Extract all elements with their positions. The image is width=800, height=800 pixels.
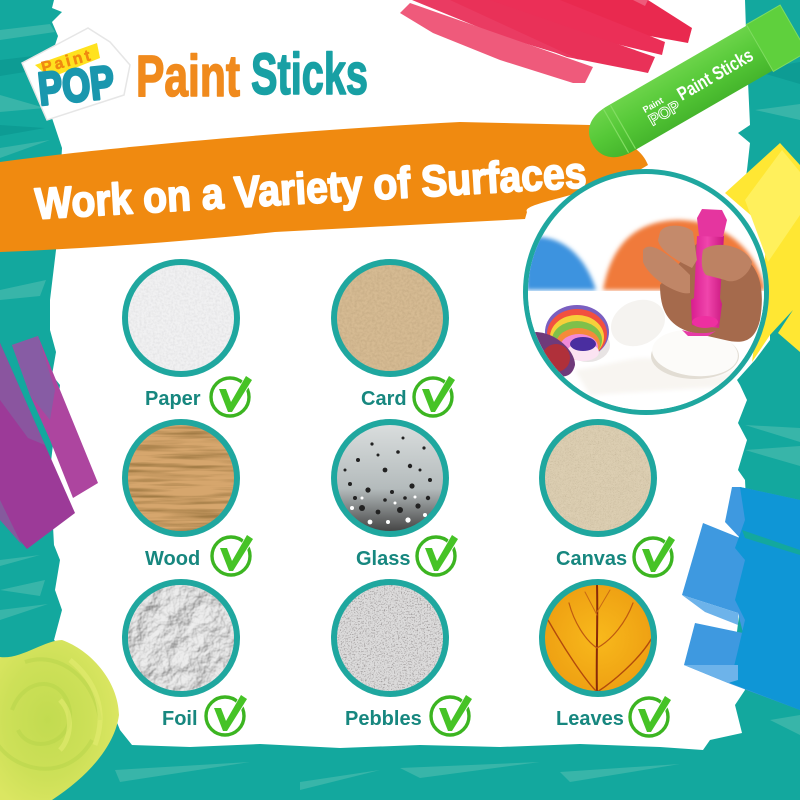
title text: Work on a Variety of Surfaces xyxy=(34,148,588,229)
white rocks xyxy=(611,300,665,346)
green paint stick xyxy=(579,5,800,168)
surface: paper: Paper xyxy=(145,388,201,410)
yellow paint strokes xyxy=(725,143,800,362)
green paint stick: Paint xyxy=(641,95,665,115)
surface: leaves xyxy=(539,579,672,736)
green paint stick: POP xyxy=(646,98,684,130)
logo: Paint Pop: POP xyxy=(36,55,117,115)
heading: Paint Sticks: Sticks xyxy=(251,42,368,107)
rainbow rock xyxy=(545,305,610,362)
green paint stick: Paint Sticks xyxy=(674,45,757,105)
logo: Paint Pop: Paint xyxy=(40,47,93,77)
surface: canvas xyxy=(539,419,676,576)
photo circle: painting a pebble xyxy=(520,165,772,421)
surface: card: Card xyxy=(361,388,407,410)
surface: pebbles xyxy=(331,579,473,735)
pink stick in hand xyxy=(691,209,727,328)
hand xyxy=(660,240,762,342)
surface: foil: Foil xyxy=(162,708,198,730)
blue paint strokes xyxy=(682,487,800,710)
heading: Paint Sticks: Paint xyxy=(136,44,240,109)
surface: glass: Glass xyxy=(356,548,410,570)
purple paint strokes xyxy=(0,336,98,549)
dark painted rock xyxy=(535,332,575,377)
orange title banner xyxy=(0,122,648,252)
logo: Paint Pop xyxy=(22,28,130,120)
surface: pebbles: Pebbles xyxy=(345,708,422,730)
surface: card xyxy=(331,259,456,416)
surface: wood xyxy=(122,419,254,575)
surface: paper xyxy=(122,259,253,416)
surface: canvas: Canvas xyxy=(556,548,627,570)
surface: leaves: Leaves xyxy=(556,708,624,730)
heading: Paint Sticks xyxy=(136,42,368,109)
green paint blob xyxy=(0,640,119,800)
surface: glass xyxy=(331,419,459,575)
surface: foil xyxy=(122,579,248,735)
surface: wood: Wood xyxy=(145,548,200,570)
pink paint strokes xyxy=(400,0,692,83)
